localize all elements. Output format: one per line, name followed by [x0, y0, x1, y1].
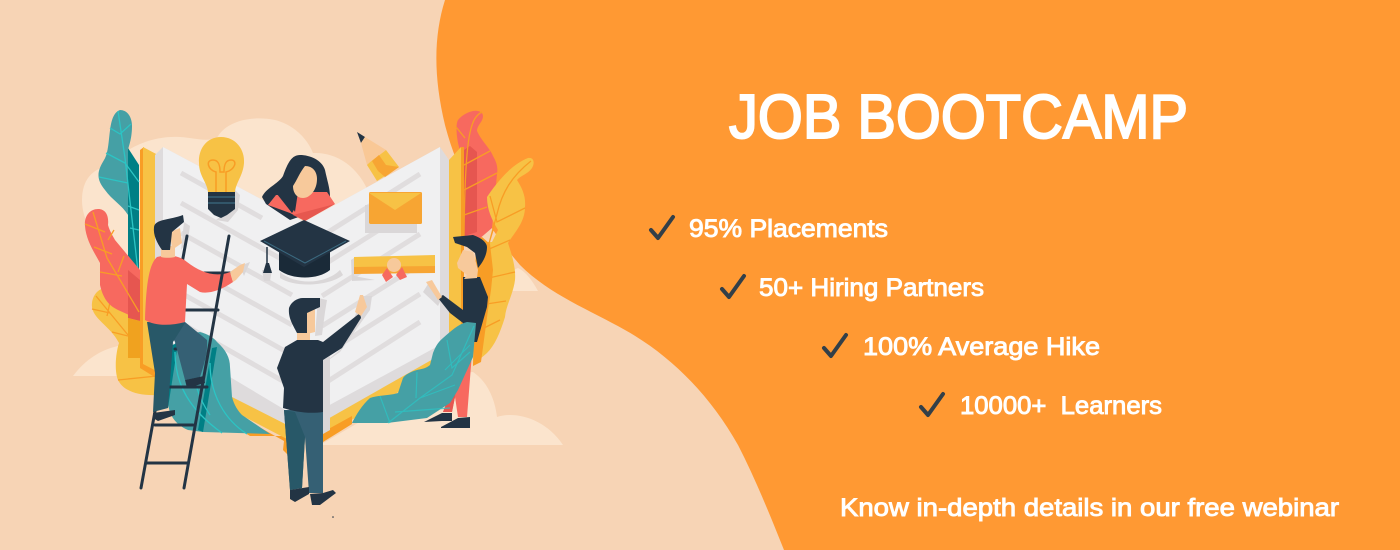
icon: check	[722, 276, 744, 297]
leaf: coral left	[85, 209, 140, 321]
label: 100% Average Hike	[863, 333, 1100, 361]
icon: light bulb	[199, 137, 244, 218]
icon: check	[921, 394, 943, 415]
title: JOB BOOTCAMP	[729, 83, 1188, 152]
person: man on right	[424, 235, 488, 428]
leaf: teal upper left	[98, 110, 139, 280]
leaf shade over cover	[128, 318, 140, 358]
list item: 10000+ Learners	[921, 392, 1162, 420]
background clouds	[73, 118, 563, 445]
icon: pencil	[357, 132, 399, 181]
ladder back rail and rungs	[141, 236, 230, 488]
leaf: yellow lower left	[92, 288, 158, 395]
hair	[154, 215, 184, 250]
footer call to action: Know in-depth details in our free webinar	[840, 494, 1339, 522]
ladder front rail	[184, 236, 229, 488]
dark leg	[147, 322, 185, 412]
neck and face	[161, 228, 182, 258]
tiny dot	[332, 516, 334, 518]
hand	[230, 263, 245, 282]
book cover	[140, 147, 464, 458]
person: man in front	[277, 295, 367, 505]
icon: envelope	[365, 192, 422, 233]
icon: check	[651, 217, 673, 238]
icon shadows on the page	[181, 190, 442, 434]
book pages	[155, 147, 449, 433]
label: 10000+ Learners	[960, 392, 1162, 420]
light leg	[165, 322, 207, 380]
label: 50+ Hiring Partners	[759, 274, 984, 302]
person: man on ladder	[141, 215, 245, 488]
leaf: teal bottom right	[352, 322, 476, 423]
woman	[262, 155, 335, 221]
list item: 50+ Hiring Partners	[722, 274, 984, 302]
list item: 100% Average Hike	[824, 333, 1100, 361]
sweater	[145, 256, 233, 325]
illustration: book and people	[73, 110, 563, 518]
leaf: teal bottom behind ladder	[165, 332, 270, 434]
list item: 95% Placements	[651, 215, 888, 243]
icon: diploma	[354, 255, 435, 282]
icon: graduation cap	[260, 220, 350, 278]
leaf: coral upper right	[456, 111, 497, 240]
panel: orange curved panel	[436, 0, 1400, 550]
label: 95% Placements	[689, 215, 888, 243]
icon: check	[824, 335, 846, 356]
leaf: yellow right	[473, 158, 534, 366]
shoes	[153, 376, 205, 421]
page text lines	[181, 173, 420, 385]
